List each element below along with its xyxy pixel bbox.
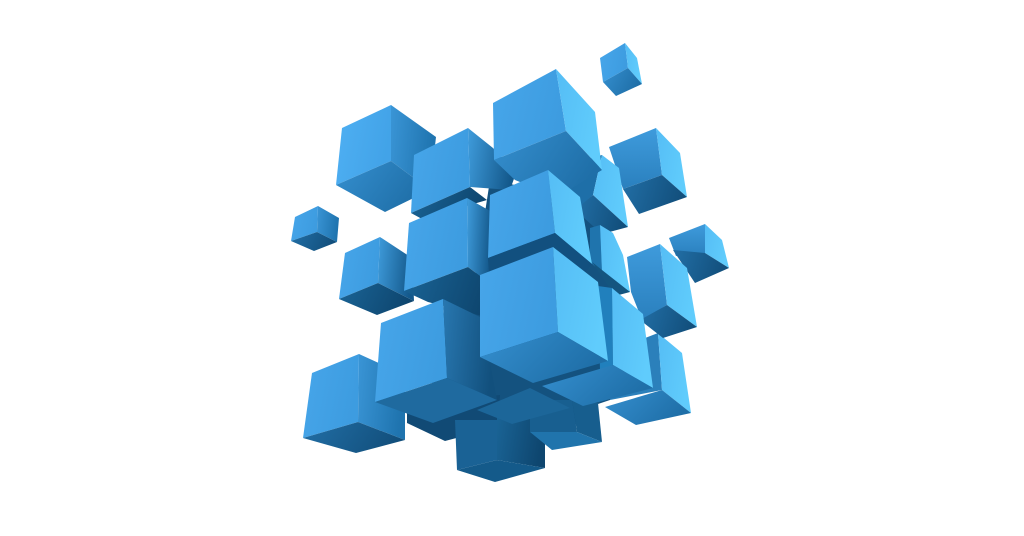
cube: thin right sliver xyxy=(590,225,630,296)
cube: mid left xyxy=(339,237,414,315)
cube: lower left xyxy=(303,354,405,453)
cube: large top xyxy=(493,69,602,197)
cube: centre upper xyxy=(488,170,592,290)
cube: far right xyxy=(669,224,729,283)
cube: bottom right xyxy=(605,333,691,425)
cube: front large xyxy=(480,247,608,383)
cube: behind top right xyxy=(565,155,628,234)
cube: right middle xyxy=(627,244,697,338)
cube: bottom right small xyxy=(530,400,602,450)
cube: small left xyxy=(291,206,339,251)
cube: bottom under ledge xyxy=(407,395,500,441)
cube: right upper xyxy=(609,128,687,214)
cube: dark core behind the cluster xyxy=(407,180,638,440)
cube: centre left upper xyxy=(411,128,516,219)
cube: small top right xyxy=(600,43,642,96)
cube: centre dark diamond xyxy=(477,388,570,424)
cube: centre left lower xyxy=(404,198,492,318)
cube: right of front xyxy=(542,286,653,406)
cube: bottom centre xyxy=(455,412,545,482)
cube: top left xyxy=(336,105,436,212)
cube: large lower centre xyxy=(375,299,497,423)
